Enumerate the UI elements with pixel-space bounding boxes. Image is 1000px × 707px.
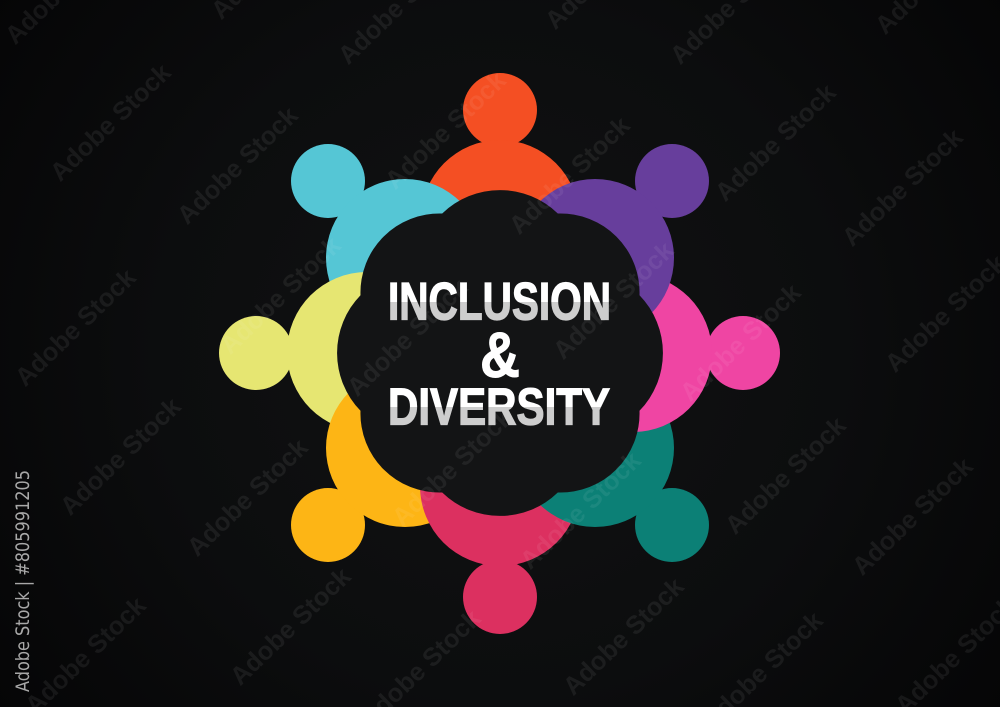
watermark pattern: Adobe Stock (182, 433, 314, 562)
watermark pattern: Adobe Stock (675, 278, 807, 407)
watermark pattern: Adobe Stock (342, 273, 474, 402)
watermark pattern: Adobe Stock (380, 66, 512, 195)
watermark pattern: Adobe Stock (55, 392, 187, 521)
watermark pattern: Adobe Stock (847, 452, 979, 581)
watermark pattern: Adobe Stock (710, 78, 842, 207)
watermark pattern: Adobe Stock (720, 411, 852, 540)
person: purple upper right (516, 144, 709, 337)
watermark pattern: Adobe Stock (515, 446, 647, 575)
watermark pattern: Adobe Stock (225, 562, 357, 691)
watermark pattern: Adobe Stock (548, 236, 680, 365)
figure ring: eight people around a table (219, 73, 780, 634)
person: lime left (219, 272, 447, 432)
person: teal lower right (516, 369, 709, 562)
title: ampersand: & (480, 319, 520, 391)
person: amber lower left (291, 369, 484, 562)
title: DIVERSITY: DIVERSITY (388, 378, 610, 436)
watermark pattern: Adobe Stock (10, 263, 142, 392)
watermark pattern: Adobe Stock (45, 58, 177, 187)
title: INCLUSION: INCLUSION (388, 272, 611, 332)
watermark pattern: Adobe Stock (215, 231, 347, 360)
watermark pattern: Adobe Stock (558, 572, 690, 701)
person: crimson bottom (420, 406, 580, 634)
central scalloped badge (337, 190, 663, 516)
stock id label: Adobe Stock | #805991205 (12, 470, 34, 692)
watermark pattern: Adobe Stock (504, 111, 636, 240)
person: orange top (421, 73, 579, 298)
person: cyan upper left (291, 144, 484, 337)
person: pink right (554, 274, 780, 432)
watermark pattern: Adobe Stock (172, 101, 304, 230)
watermark pattern: Adobe Stock (837, 123, 969, 252)
watermark pattern: Adobe Stock (387, 403, 519, 532)
